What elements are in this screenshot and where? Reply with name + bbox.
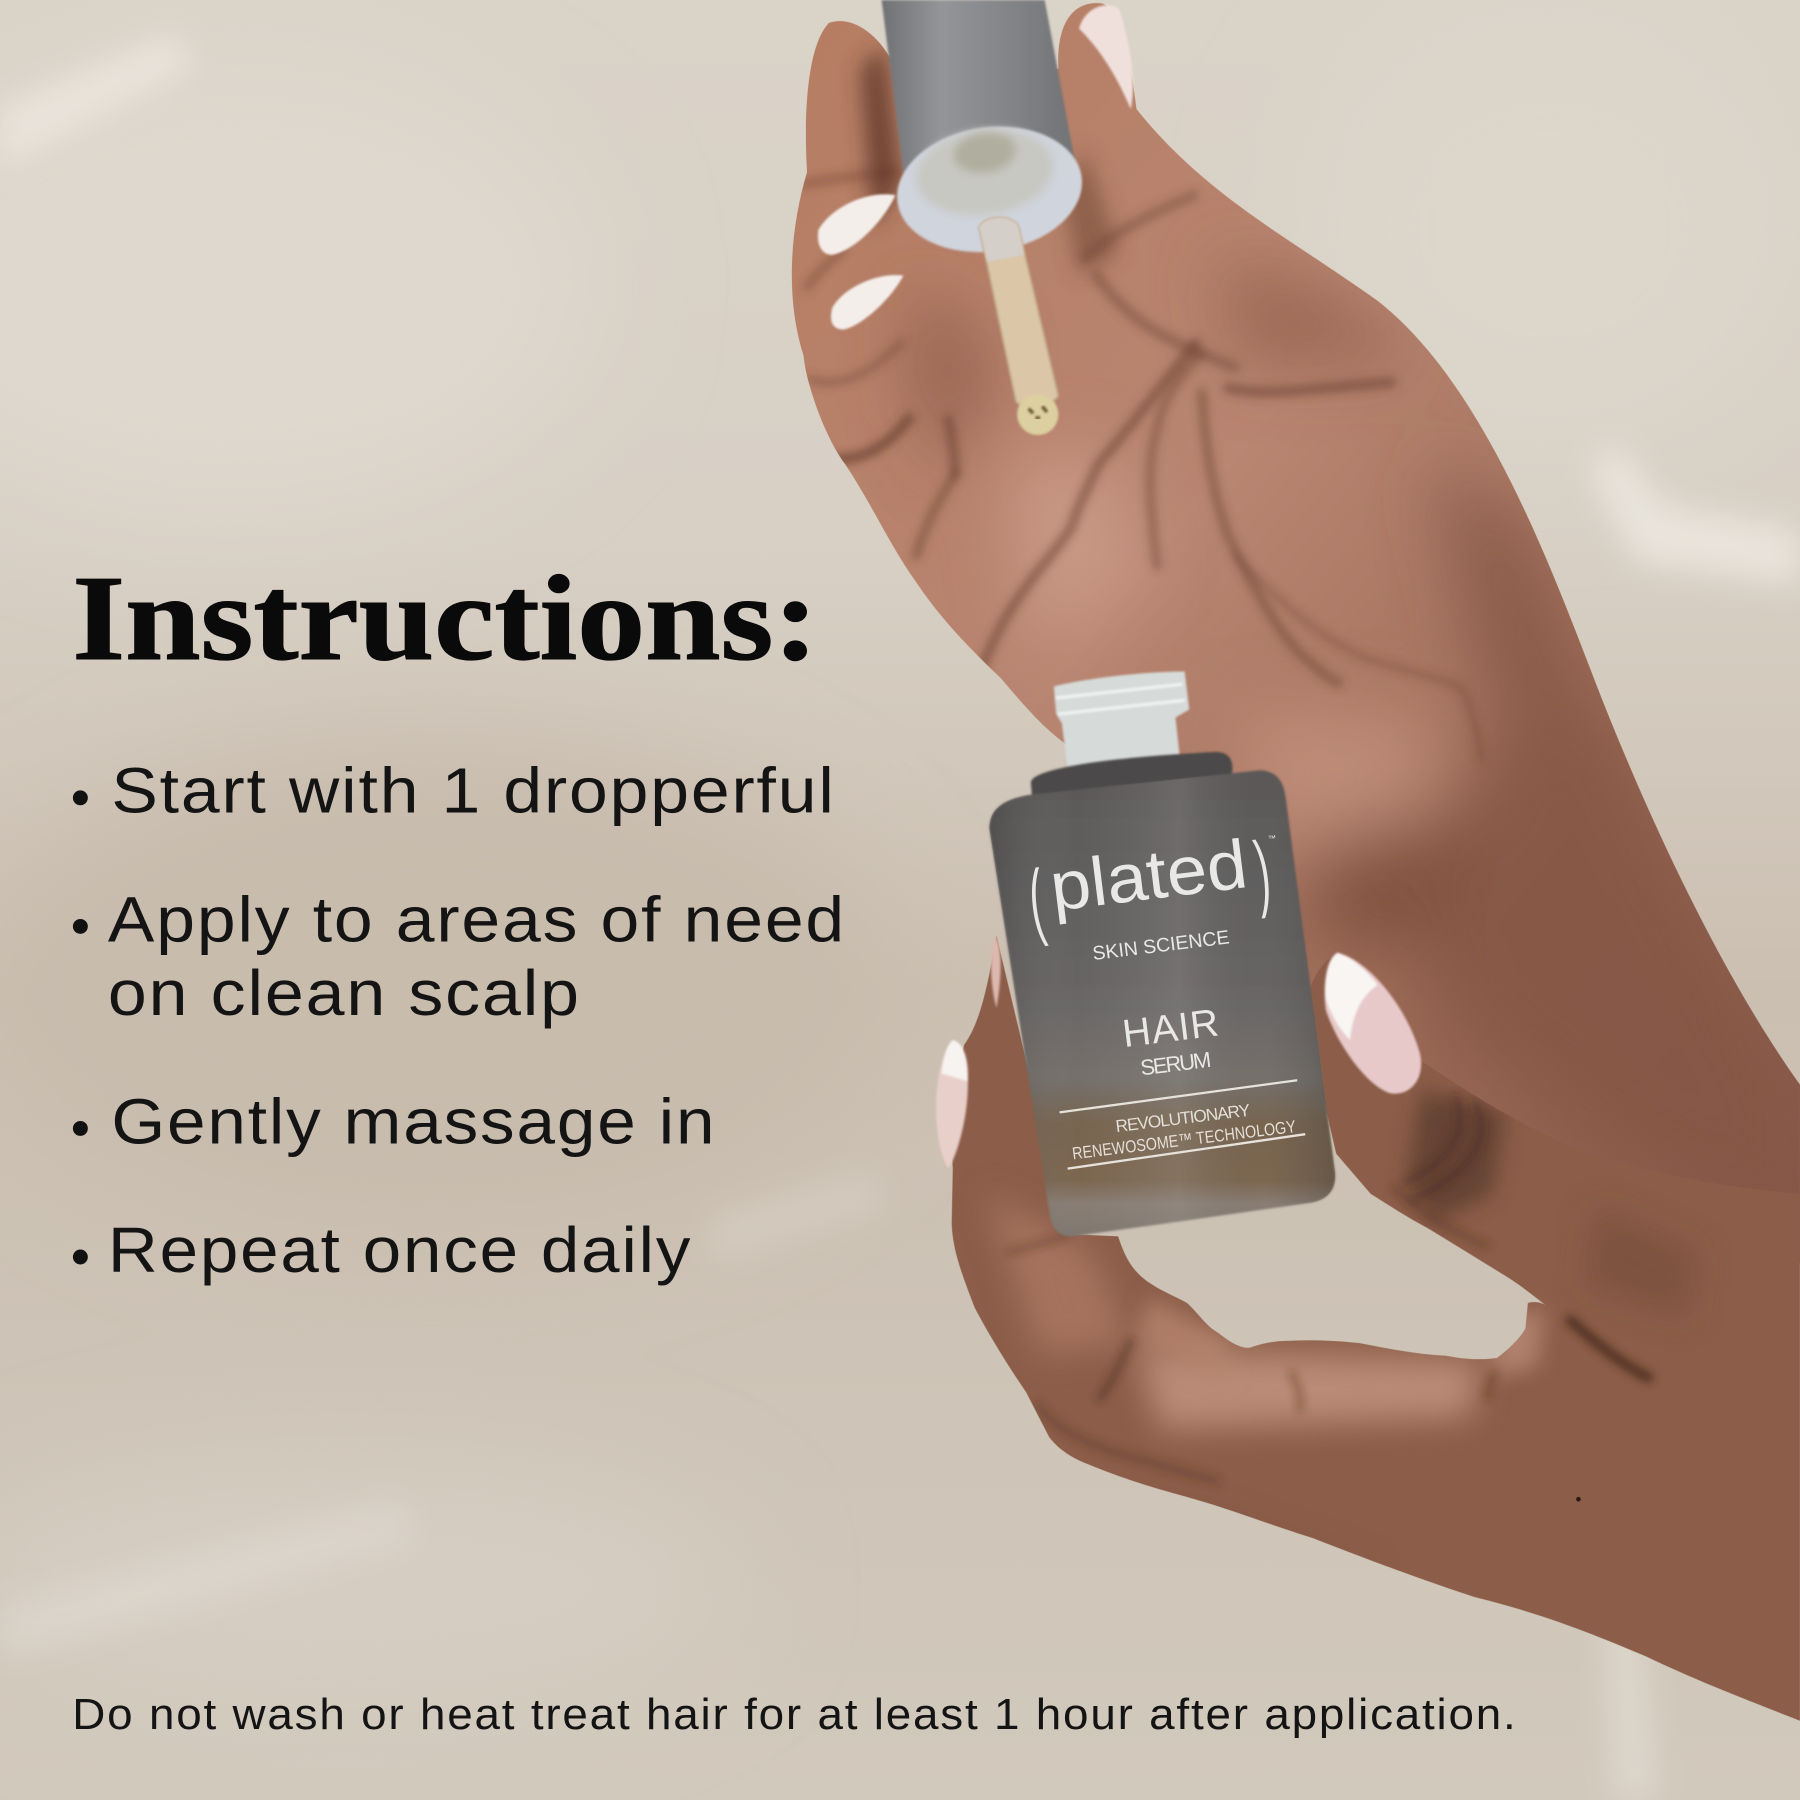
label text: logo: plated <box>1046 825 1251 926</box>
step 3: Gently massage in <box>111 1085 716 1157</box>
pipette <box>979 218 1058 407</box>
fingernails of upper hand <box>818 5 1133 329</box>
label rules <box>1060 1080 1305 1169</box>
finger shadow by cap <box>861 46 1119 276</box>
thumb and finger nails of lower hand <box>936 936 1421 1169</box>
step 4: Repeat once daily <box>108 1214 692 1286</box>
instruction list <box>73 755 846 1286</box>
bottle body <box>990 770 1335 1236</box>
serum bottle <box>990 672 1335 1236</box>
hand light and shadow areas <box>992 1204 1694 1542</box>
palm creases <box>805 172 1482 760</box>
title: Instructions: <box>72 552 818 686</box>
finger behind bottle <box>991 936 1001 1008</box>
label text: logo: ) <box>1250 823 1275 919</box>
label text: serum: SERUM <box>1139 1047 1213 1080</box>
label text: logo: ™ <box>1268 834 1277 843</box>
label text: technology: REVOLUTIONARY <box>1114 1100 1252 1136</box>
upper hand holding dropper <box>792 3 1800 1263</box>
label text: skin science: SKIN SCIENCE <box>1091 926 1231 965</box>
step 1: Start with 1 dropperful <box>111 755 836 827</box>
index finger nail <box>936 1040 968 1169</box>
label text: hair: HAIR <box>1120 1002 1221 1056</box>
label text: technology: RENEWOSOME™ TECHNOLOGY <box>1071 1116 1297 1163</box>
mole <box>1576 1497 1581 1502</box>
collar <box>1031 752 1232 809</box>
dropper cap and pipette <box>882 0 1090 435</box>
step 2: Apply to areas of need <box>108 883 846 955</box>
knuckle and thumb creases <box>1010 1096 1648 1481</box>
cap underside ring <box>889 115 1090 264</box>
label text: logo <box>1024 823 1277 948</box>
step 2 <box>73 883 846 1029</box>
palm light and shadow areas <box>907 253 1800 1240</box>
lower hand holding bottle <box>948 936 1800 1721</box>
footnote: Do not wash or heat treat hair for at least 1 hour after application. <box>72 1691 1518 1739</box>
thumb nail <box>1325 953 1421 1094</box>
label text: logo: ( <box>1024 852 1049 948</box>
step 2: on clean scalp <box>108 957 581 1029</box>
bottle neck with threads <box>1054 672 1189 769</box>
